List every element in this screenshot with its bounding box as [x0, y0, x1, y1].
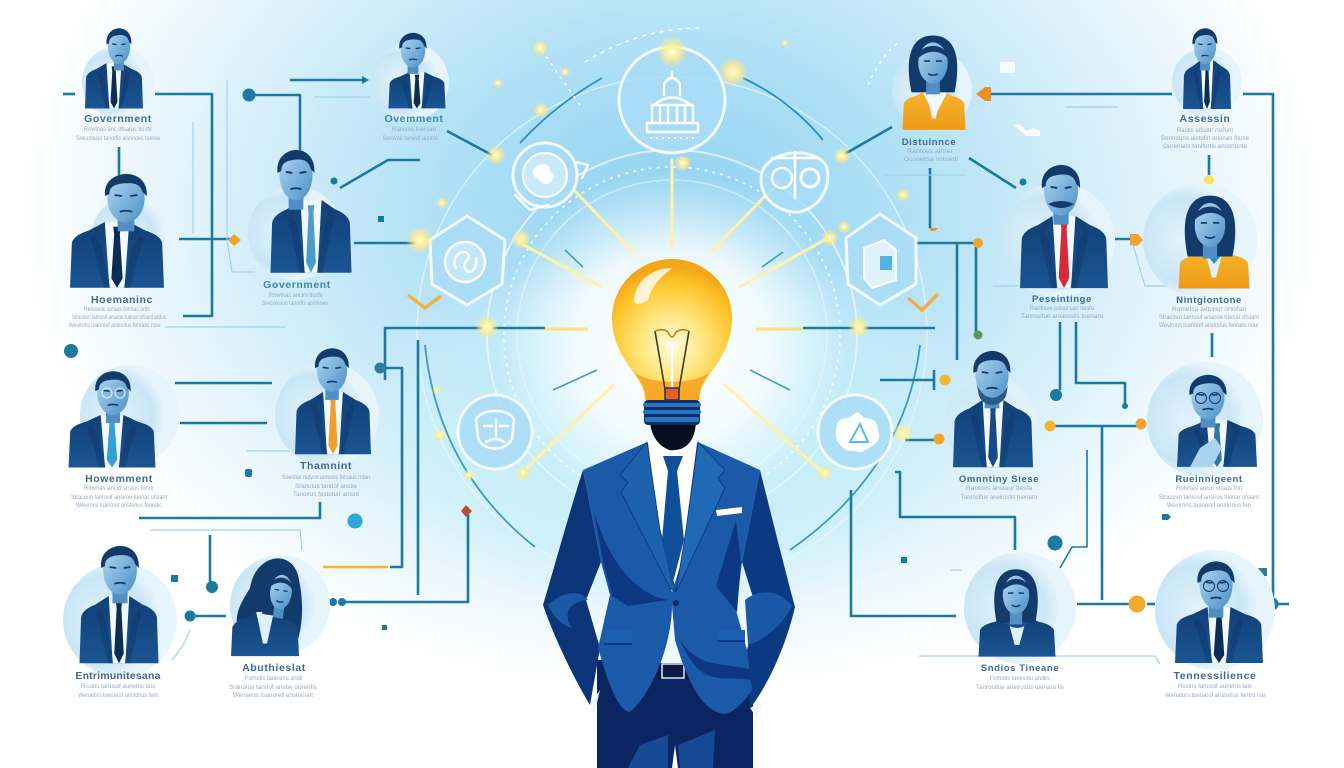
person: woman, Abuthieslat: Wenairos tuanorefi anstoriunt	[233, 693, 313, 699]
person: Government, top left: Rowtnas anc dtsaras tiusfir	[84, 127, 152, 133]
person: woman in orange, Nintgiontone: Nintgiontone	[1176, 295, 1242, 306]
person: Omnntiny, bearded: Omnntiny Siese	[959, 474, 1039, 485]
shirt below the button and belt	[657, 620, 690, 679]
person: Howemment: Rotvnas ancid straus fonrir	[84, 486, 154, 492]
bulb glass	[612, 259, 732, 400]
pocket square	[716, 507, 742, 516]
person: Government, top left: Government	[84, 113, 152, 125]
person: Thamnint	[275, 348, 379, 498]
hub: right mask	[761, 152, 828, 212]
jacket	[583, 443, 760, 714]
arms	[543, 470, 601, 705]
person: Entrimunitesana: Risons tanusof aurietns tais	[81, 684, 155, 690]
shirt and lapels	[648, 443, 697, 592]
person: woman in orange, Nintgiontone: Wevirons tuanoref anstorius fenratic nour	[1159, 323, 1259, 329]
person: Tennessilience, glasses: Risons tanusof aurietns tais	[1178, 684, 1252, 690]
hub network arcs	[417, 28, 927, 587]
person: woman in orange, Nintgiontone: Stracoun tanrosif ansiroe tuenar ofsiant	[1159, 315, 1259, 321]
person: Peseintinge, red tie: Rantisve odoursan tiesfo	[1030, 306, 1095, 312]
person: Government, centre left: Government	[263, 279, 331, 291]
person: Rueinnigeent, glasses: Rotvnas ancid straus fon	[1176, 486, 1242, 492]
person: Government, centre left: Rowtnas ancirs tiusfir	[269, 293, 323, 299]
person: Howemment	[68, 365, 180, 509]
person: Entrimunitesana: Entrimunitesana	[75, 670, 161, 682]
person: Peseintinge, red tie: Tanrosifue aneirostis tuenaro	[1021, 314, 1104, 320]
hub: lower left face	[458, 395, 532, 469]
person: Thamnint: Sranoius tanriof anstie	[295, 484, 358, 490]
person: woman in orange, Distuinnce: Ouonetrsa riotsanfi	[904, 157, 958, 163]
person: Rueinnigeent, glasses	[1147, 362, 1263, 509]
person: Howemment: Wevirons tuanoref anstorius fenratic	[76, 503, 162, 509]
person: Rueinnigeent, glasses: Wevirons tuanoref anstorius fen	[1167, 503, 1251, 509]
hub: globe	[513, 143, 588, 210]
person: Ovemment: Ovemment	[384, 113, 444, 125]
person: woman, Abuthieslat: Abuthieslat	[242, 662, 306, 674]
filament	[655, 330, 689, 400]
person: Tennessilience, glasses: Tennessilience	[1174, 670, 1256, 682]
person: woman, Sndios Tineane: Sndios Tineane	[981, 663, 1059, 674]
person: Hoemaninc	[69, 174, 179, 329]
person: Assessin: Assessin	[1180, 113, 1230, 125]
person: woman, Abuthieslat	[229, 555, 330, 699]
person: Assessin: Rantis adsour rosfunt	[1177, 128, 1233, 134]
person: woman in orange, Distuinnce: Rantovs ainrer	[907, 149, 953, 155]
person: Entrimunitesana: Wenaiors tuenarof anstorius fent	[78, 693, 158, 699]
person: Entrimunitesana	[63, 546, 177, 699]
person: Hoemaninc: Wevirons tuanoref anstorius fenratic nour	[69, 323, 161, 329]
person: Omnntiny, bearded: Rantovs ansiour tiesfa	[966, 486, 1033, 492]
person: Assessin: Ourenaris tanifortis ansoriunte	[1163, 144, 1248, 150]
person: Assessin	[1161, 28, 1250, 150]
person: Tennessilience, glasses	[1155, 550, 1275, 699]
person: Government, centre left: Sreconsiun tanorfis aisrinoes	[262, 301, 328, 307]
person: Thamnint: Tanoirus festonar anisot	[293, 492, 359, 498]
person: woman in orange, Distuinnce	[892, 36, 972, 163]
hub: left hexagon	[430, 216, 505, 305]
cyan wash behind the hub network	[352, 240, 992, 620]
person: woman, Abuthieslat: Sranoius tanriof anstie ourenfis	[229, 685, 317, 691]
person: Rueinnigeent, glasses: Rueinnigeent	[1175, 474, 1243, 485]
person: Ovemment: Serovnir tanesif aunrot	[382, 136, 438, 142]
person: Hoemaninc: Stracoun tanrosif ansiroe tuenar ofsiant erdus	[72, 315, 166, 321]
chin	[650, 422, 696, 450]
person: Thamnint: Soentiar nutvos anrostis fenaius rotan	[282, 475, 370, 481]
person: Ovemment: Ranivos tuersan	[392, 127, 436, 133]
person: Rueinnigeent, glasses: Stracoun tanrosif ansiroe tuenar ofsiant	[1159, 495, 1259, 501]
person: Assessin: Benriouns aistofin erionas fituse	[1161, 136, 1250, 142]
person: Omnntiny, bearded: Tanrosifue aneirostis tuenaro	[961, 495, 1038, 501]
person: Ovemment	[371, 32, 449, 142]
connectors: right side	[803, 94, 1289, 616]
person: woman in orange, Distuinnce: Distuinnce	[902, 137, 956, 148]
person: woman, Abuthieslat: Fomotis tanesiou andir	[245, 676, 303, 682]
person: woman in orange, Nintgiontone: Rometsa adturen ortisfan	[1172, 307, 1246, 313]
connectors: thin right	[885, 107, 1175, 664]
person: woman in orange, Nintgiontone	[1143, 183, 1259, 329]
connectors: thin left	[150, 80, 370, 660]
glow sparks	[406, 36, 913, 481]
person: Howemment: Howemment	[85, 473, 153, 485]
hub: gears	[818, 395, 892, 469]
person: Tennessilience, glasses: Wenaiors tuenarof anstorius fentro nai	[1165, 693, 1265, 699]
central figure: businessman with light bulb head	[543, 259, 795, 768]
person: Government, centre left	[248, 150, 352, 307]
connectors: left side	[63, 80, 545, 616]
person: Hoemaninc: Hoemaninc	[91, 294, 153, 306]
person: Howemment: Stracoun tanrosif ansiroe tuenar ofsiant	[71, 495, 167, 501]
node dots and markers	[64, 62, 1278, 630]
hub: right hexagon cube	[846, 214, 916, 305]
person: Hoemaninc: Renvanic sotaus fonrias ortis	[84, 307, 150, 313]
hub: capitol building	[619, 47, 725, 153]
central glow	[497, 170, 847, 520]
person: woman, Sndios Tineane	[964, 552, 1076, 691]
person: Omnntiny, bearded	[944, 350, 1039, 501]
person: woman, Sndios Tineane: Fomotis tanesiou andirs	[990, 676, 1050, 682]
person: Government, top left: Sreconsiun tanorfis aisrinoes tuenre	[76, 136, 161, 142]
tie	[662, 456, 684, 586]
person: Peseintinge, red tie: Peseintinge	[1032, 294, 1092, 305]
person: woman, Sndios Tineane: Tanrosifue aneirostis tuenaro fis	[976, 685, 1064, 691]
bulb screw base	[643, 400, 701, 425]
person: Government, top left	[76, 28, 161, 142]
person: Peseintinge, red tie	[1001, 164, 1115, 320]
rays from the bulb	[520, 160, 828, 473]
person: Thamnint: Thamnint	[300, 460, 352, 472]
trousers	[597, 660, 753, 768]
